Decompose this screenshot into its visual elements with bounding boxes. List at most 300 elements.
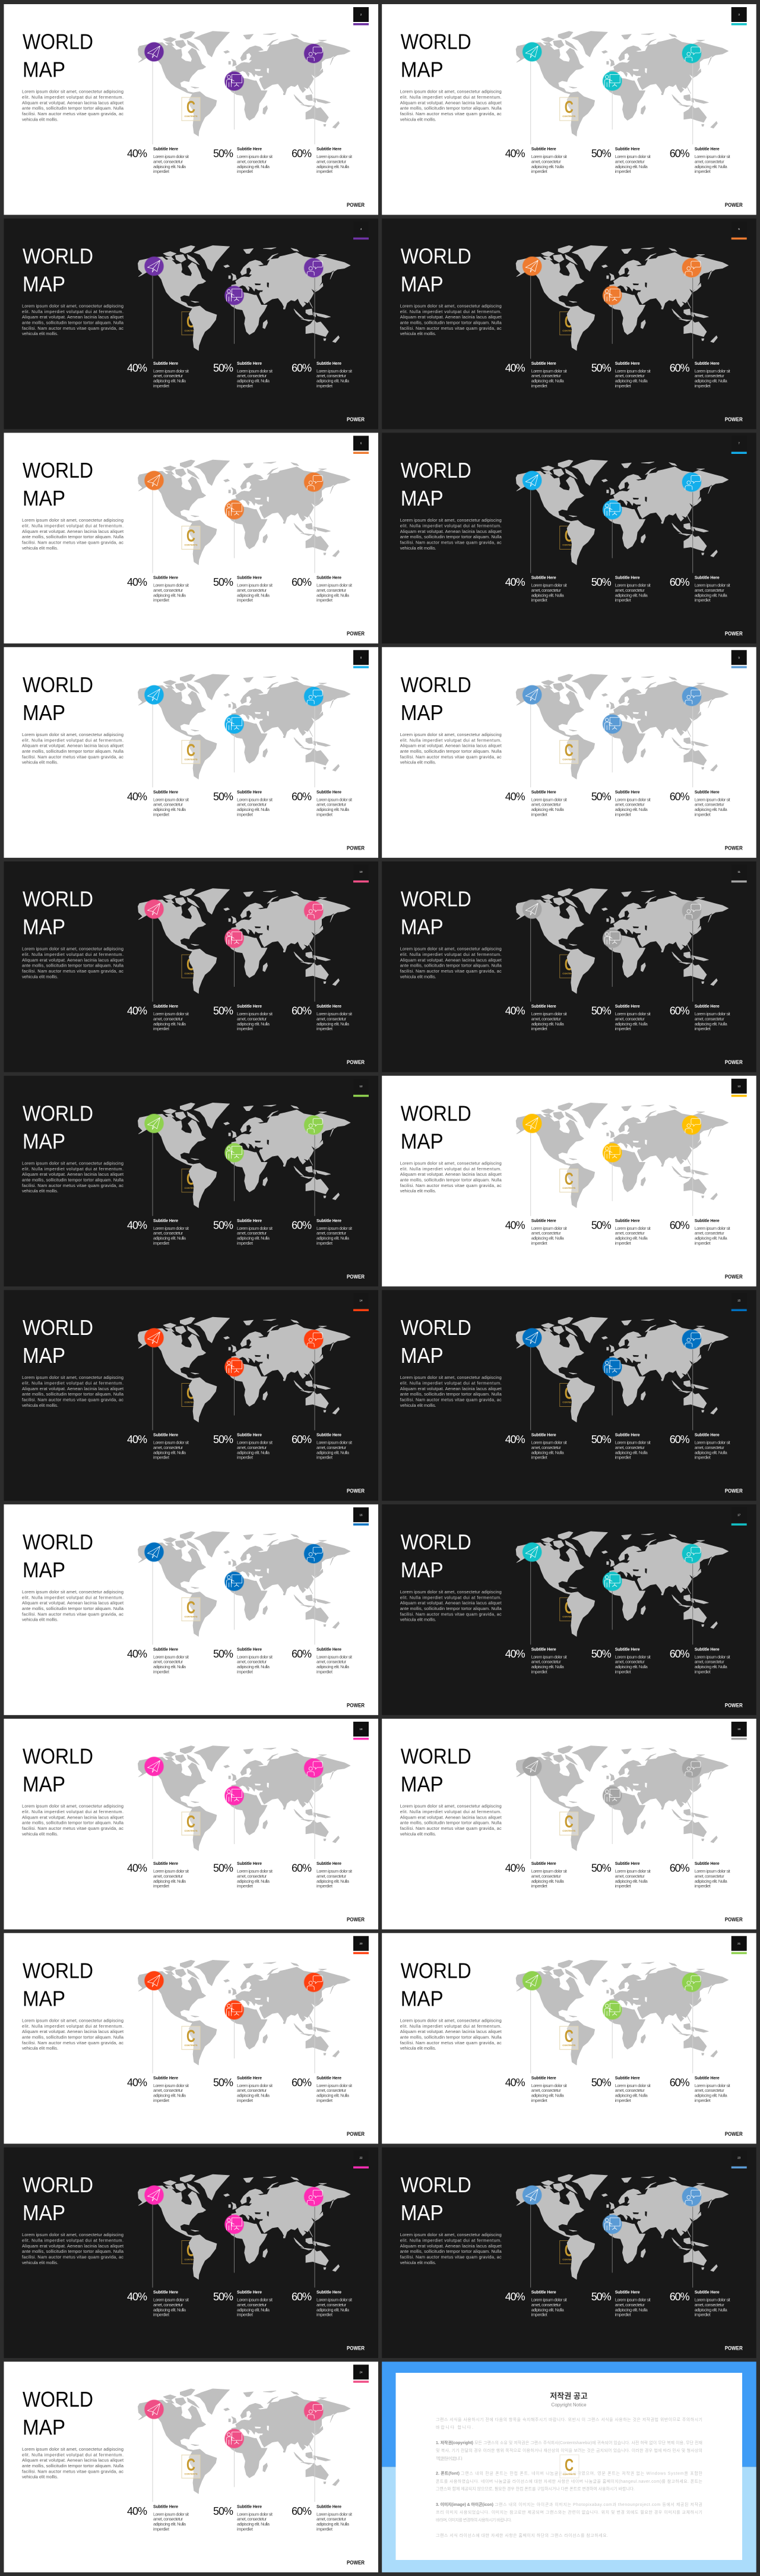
icon: presenter pin	[603, 286, 622, 305]
watermark logo	[560, 2241, 578, 2264]
stat 50%: amet, consectetur	[615, 159, 645, 164]
watermark logo: C	[565, 1813, 574, 1832]
body text: facilisi. Nam auctor metus vitae quam gravida, ac	[22, 539, 124, 545]
stat 40%: adipiscing elit. Nulla	[153, 378, 186, 384]
stat 60%	[670, 362, 730, 389]
body text: ante mollis, sollicitudin tempor tortor aliquam. Nulla	[22, 2249, 124, 2254]
body text	[22, 2232, 124, 2265]
stat 60%: 60%	[670, 147, 690, 159]
stat 40%: imperdiet	[531, 1454, 547, 1460]
stat 60%: amet, consectetur	[316, 2517, 347, 2522]
body text: vehicula elit mollis.	[400, 1403, 436, 1408]
title	[23, 1530, 93, 1582]
stat 50%: Subtitle Here	[615, 1433, 640, 1438]
body text: facilisi. Nam auctor metus vitae quam gravida, ac	[22, 1397, 124, 1402]
stat 40%: adipiscing elit. Nulla	[531, 1236, 565, 1241]
stat 40%: adipiscing elit. Nulla	[153, 1450, 186, 1455]
watermark logo: CONTENTS	[184, 2258, 198, 2261]
world map	[516, 31, 729, 136]
title: MAP	[401, 2201, 444, 2225]
body text: Lorem ipsum dolor sit amet, consectetur adipiscing	[22, 2446, 124, 2452]
stat 50%: imperdiet	[615, 1026, 631, 1031]
body text: vehicula elit mollis.	[400, 1831, 436, 1836]
connector lines	[531, 1347, 693, 1431]
world map	[138, 245, 350, 351]
body text	[400, 1804, 502, 1836]
page number badge: 2	[360, 13, 362, 16]
stat 50%	[591, 790, 651, 817]
title	[23, 673, 93, 725]
body text: elit. Nulla imperdiet volutpat dui at fermentum.	[22, 737, 124, 743]
body text: Lorem ipsum dolor sit amet, consectetur adipiscing	[400, 946, 502, 952]
body text: facilisi. Nam auctor metus vitae quam gravida, ac	[22, 2254, 124, 2260]
brand label: POWER	[347, 2559, 365, 2566]
title: MAP	[23, 1129, 65, 1153]
copyright clause 3: 3. 이미지(image) & 아이콘(icon)	[436, 2502, 493, 2507]
watermark logo: CONTENTS	[184, 757, 198, 760]
icon: paper plane pin	[522, 686, 542, 705]
panel: slide 14 dark red	[4, 1290, 378, 1501]
icon: paper plane pin	[145, 257, 164, 276]
page number badge	[732, 1507, 747, 1526]
brand label: POWER	[347, 1274, 365, 1280]
stat 40%: Subtitle Here	[531, 1862, 556, 1866]
stat 50%: amet, consectetur	[237, 1016, 267, 1021]
stat 60%: Subtitle Here	[316, 790, 341, 794]
title	[401, 1101, 471, 1153]
stat 60%: Subtitle Here	[316, 1005, 341, 1009]
stat 50%: Subtitle Here	[615, 1647, 640, 1652]
body text	[22, 2446, 124, 2480]
stat 40%: amet, consectetur	[531, 802, 561, 807]
stat 40%: amet, consectetur	[531, 1445, 561, 1450]
body text: elit. Nulla imperdiet volutpat dui at fermentum.	[22, 94, 124, 100]
icon: chat person pin	[304, 1544, 323, 1563]
stat 40%: imperdiet	[531, 383, 547, 389]
stat 40%: Lorem ipsum dolor sit	[531, 582, 567, 588]
stat 40%	[505, 1433, 567, 1460]
body text: elit. Nulla imperdiet volutpat dui at fermentum.	[22, 2452, 124, 2457]
watermark logo: C	[186, 2027, 195, 2046]
panel: slide 2 light purple	[4, 4, 378, 215]
title	[401, 673, 471, 725]
stat 50%: adipiscing elit. Nulla	[237, 1879, 270, 1884]
stat 40%	[127, 790, 189, 817]
stat 40%	[505, 1862, 567, 1889]
body text: Lorem ipsum dolor sit amet, consectetur adipiscing	[400, 89, 502, 94]
stat 50%: amet, consectetur	[237, 1445, 267, 1450]
stat 40%: 40%	[127, 147, 147, 159]
stat 50%: Lorem ipsum dolor sit	[237, 368, 273, 374]
page number badge: 21	[737, 1942, 741, 1945]
stat 60%: adipiscing elit. Nulla	[316, 2093, 350, 2098]
stat 50%: imperdiet	[237, 2526, 253, 2531]
stat 50%: Subtitle Here	[237, 1219, 262, 1223]
connector lines	[153, 276, 315, 359]
stat 50%: adipiscing elit. Nulla	[237, 1236, 270, 1241]
body text: facilisi. Nam auctor metus vitae quam gravida, ac	[400, 111, 502, 116]
title: MAP	[401, 1343, 444, 1368]
icon: paper plane pin	[522, 1543, 542, 1562]
stat 40%: adipiscing elit. Nulla	[531, 164, 565, 169]
title: WORLD	[401, 1101, 471, 1125]
stat 40%: adipiscing elit. Nulla	[531, 2093, 565, 2098]
copyright clause 1: 모든 그랜스의 소유 및 저작권은 그랜스 주식회사(Contentsharebiz)에 귀속되어 있습니다. 사전 허락 없이 무단 복제 이용, 무단 전재	[474, 2440, 702, 2445]
stat 50%: Lorem ipsum dolor sit	[615, 1226, 651, 1231]
stat 60%: amet, consectetur	[695, 159, 724, 164]
copyright heading: Copyright Notice	[551, 2403, 587, 2407]
stat 60%: adipiscing elit. Nulla	[695, 807, 728, 812]
page number badge: 8	[360, 656, 362, 659]
stat 50%: Subtitle Here	[615, 2076, 640, 2081]
stat 40%: amet, consectetur	[153, 1873, 183, 1879]
stat 50%: Lorem ipsum dolor sit	[615, 368, 651, 374]
stat 60%: imperdiet	[695, 1240, 711, 1246]
stat 40%: 40%	[127, 2076, 147, 2088]
body text: elit. Nulla imperdiet volutpat dui at fermentum.	[22, 523, 124, 529]
body text: Lorem ipsum dolor sit amet, consectetur adipiscing	[22, 89, 124, 94]
stat 60%: imperdiet	[316, 1026, 332, 1031]
stat 50%: Lorem ipsum dolor sit	[237, 1011, 273, 1016]
stat 50%: Subtitle Here	[615, 790, 640, 794]
stat 40%: amet, consectetur	[153, 2088, 183, 2093]
body text: elit. Nulla imperdiet volutpat dui at fermentum.	[400, 737, 502, 743]
stat 50%: amet, consectetur	[237, 802, 267, 807]
stat 60%: Subtitle Here	[316, 1219, 341, 1223]
title: WORLD	[401, 458, 471, 482]
title: MAP	[23, 1558, 65, 1582]
icon: presenter pin	[224, 715, 243, 734]
watermark logo: CONTENTS	[184, 1615, 198, 1618]
body text: elit. Nulla imperdiet volutpat dui at fermentum.	[22, 2023, 124, 2029]
stat 40%: Subtitle Here	[153, 1433, 178, 1438]
body text: facilisi. Nam auctor metus vitae quam gravida, ac	[22, 2040, 124, 2045]
stat 40%: adipiscing elit. Nulla	[153, 2521, 186, 2527]
stat 40%: adipiscing elit. Nulla	[531, 378, 565, 384]
stat 60%: adipiscing elit. Nulla	[316, 164, 350, 169]
stat 50%: Subtitle Here	[237, 1647, 262, 1652]
stat 50%: imperdiet	[237, 1669, 253, 1674]
brand label: POWER	[725, 2131, 743, 2138]
stat 50%: imperdiet	[237, 1026, 253, 1031]
watermark logo	[560, 740, 578, 763]
stat 60%: 60%	[670, 2076, 690, 2088]
stat 60%: imperdiet	[316, 1669, 332, 1674]
panel: slide 8 light sky blue	[4, 647, 378, 858]
stat 40%: imperdiet	[531, 1240, 547, 1246]
watermark logo: CONTENTS	[562, 115, 576, 118]
body text: Lorem ipsum dolor sit amet, consectetur adipiscing	[400, 1804, 502, 1808]
body text	[400, 303, 502, 336]
stat 60%: imperdiet	[316, 598, 332, 602]
body text: elit. Nulla imperdiet volutpat dui at fermentum.	[400, 1809, 502, 1814]
stat 40%: 40%	[505, 1648, 525, 1660]
title	[23, 1101, 93, 1153]
stat 60%: Lorem ipsum dolor sit	[316, 1868, 352, 1874]
page number badge: 6	[360, 442, 362, 444]
stat 60%: adipiscing elit. Nulla	[695, 1450, 728, 1455]
stat 60%: amet, consectetur	[695, 1230, 724, 1236]
stat 60%: Lorem ipsum dolor sit	[316, 2511, 352, 2517]
brand label: POWER	[347, 2345, 365, 2351]
stat 60%: Subtitle Here	[316, 362, 341, 366]
watermark logo	[182, 740, 200, 763]
body text	[22, 1589, 124, 1622]
stat 60%: amet, consectetur	[695, 1445, 724, 1450]
body text: facilisi. Nam auctor metus vitae quam gravida, ac	[400, 1611, 502, 1617]
body text: Aliquam erat volutpat. Aenean lacinia lacus aliquet	[400, 100, 502, 105]
stat 40%: 40%	[505, 576, 525, 588]
stat 50%: Lorem ipsum dolor sit	[237, 1654, 273, 1659]
stat 40%	[127, 1219, 189, 1246]
body text: Aliquam erat volutpat. Aenean lacinia lacus aliquet	[400, 529, 502, 534]
stat 50%: amet, consectetur	[237, 1873, 267, 1879]
stat 50%: adipiscing elit. Nulla	[615, 807, 648, 812]
world map	[138, 1317, 350, 1422]
stat 50%	[213, 576, 273, 602]
copyright heading: 저작권 공고	[550, 2392, 588, 2400]
stat 40%: 40%	[505, 1219, 525, 1231]
title	[401, 30, 471, 82]
body text	[400, 946, 502, 979]
stat 50%: amet, consectetur	[615, 1445, 645, 1450]
stat 40%: 40%	[127, 791, 147, 803]
brand label: POWER	[347, 1917, 365, 1923]
stat 60%: adipiscing elit. Nulla	[695, 2093, 728, 2098]
stat 60%: Lorem ipsum dolor sit	[316, 154, 352, 159]
body text	[400, 1160, 502, 1194]
stat 60%: Subtitle Here	[695, 1862, 720, 1866]
body text: elit. Nulla imperdiet volutpat dui at fermentum.	[400, 1595, 502, 1600]
stat 60%: Subtitle Here	[316, 1433, 341, 1438]
icon: chat person pin	[304, 258, 323, 277]
connector lines	[153, 1561, 315, 1644]
stat 50%: adipiscing elit. Nulla	[615, 1879, 648, 1884]
stat 60%	[670, 1219, 730, 1246]
stat 50%: adipiscing elit. Nulla	[615, 1236, 648, 1241]
stat 40%: imperdiet	[153, 598, 169, 602]
panel: slide 22 dark magenta	[4, 2147, 378, 2358]
copyright intro	[436, 2417, 702, 2430]
stat 60%: imperdiet	[695, 2312, 711, 2317]
stat 50%: Subtitle Here	[237, 2505, 262, 2509]
watermark logo	[182, 2455, 200, 2478]
title: WORLD	[401, 2173, 471, 2197]
stat 50%: imperdiet	[237, 1454, 253, 1460]
brand label: POWER	[347, 2131, 365, 2138]
page number badge	[732, 2151, 747, 2168]
stat 40%: adipiscing elit. Nulla	[153, 1236, 186, 1241]
stat 60%: Lorem ipsum dolor sit	[695, 154, 730, 159]
body text: ante mollis, sollicitudin tempor tortor aliquam. Nulla	[22, 1820, 124, 1826]
body text: Aliquam erat volutpat. Aenean lacinia lacus aliquet	[400, 1600, 502, 1606]
stat 60%: imperdiet	[695, 169, 711, 174]
icon: chat person pin	[682, 1759, 701, 1778]
title: WORLD	[401, 673, 471, 697]
stat 60%: 60%	[670, 2291, 690, 2303]
body text: Aliquam erat volutpat. Aenean lacinia lacus aliquet	[22, 314, 124, 320]
stat 60%: Lorem ipsum dolor sit	[695, 1226, 730, 1231]
stat 60%: imperdiet	[316, 812, 332, 817]
icon: presenter pin	[603, 1143, 622, 1162]
stat 50%: Lorem ipsum dolor sit	[615, 1654, 651, 1659]
stat 60%: Lorem ipsum dolor sit	[316, 2297, 352, 2303]
stat 60%	[292, 1005, 352, 1031]
body text: ante mollis, sollicitudin tempor tortor aliquam. Nulla	[22, 320, 124, 325]
stat 60%: adipiscing elit. Nulla	[316, 592, 350, 598]
stat 60%: Lorem ipsum dolor sit	[316, 1011, 352, 1016]
copyright intro: 그랜스 서식을 사용하시기 전에 다음의 항목을 숙지해주시기 바랍니다. 위반시 이 그랜스 서식을 사용하는 것은 저작권법 위반이므로 주의하시기	[436, 2417, 702, 2422]
title: MAP	[401, 57, 444, 82]
watermark logo	[182, 1169, 200, 1192]
stat 60%: Lorem ipsum dolor sit	[695, 797, 730, 802]
stat 40%: Lorem ipsum dolor sit	[153, 2083, 189, 2088]
copyright heading	[550, 2392, 588, 2407]
body text: Aliquam erat volutpat. Aenean lacinia lacus aliquet	[400, 1814, 502, 1820]
stat 60%	[292, 1647, 352, 1674]
stat 60%: Lorem ipsum dolor sit	[695, 1868, 730, 1874]
copyright clause 2: 그랜스 내의 한글 폰트는 한컴 폰트, 네이버 나눔글꼴을 사용하였으며, 영문 폰트는 저작권 없는 Windows System을 포함한	[461, 2470, 703, 2476]
body text: facilisi. Nam auctor metus vitae quam gravida, ac	[400, 539, 502, 545]
stat 40%: amet, consectetur	[153, 1230, 183, 1236]
stat 60%: amet, consectetur	[316, 2088, 347, 2093]
stat 40%: amet, consectetur	[531, 1659, 561, 1665]
panel: slide 24 light pink	[4, 2362, 378, 2572]
icon: presenter pin	[224, 500, 243, 519]
page number badge: 9	[738, 656, 740, 659]
stat 50%: adipiscing elit. Nulla	[237, 1664, 270, 1669]
body text: elit. Nulla imperdiet volutpat dui at fermentum.	[22, 1595, 124, 1600]
stat 60%: 60%	[292, 791, 312, 803]
stat 50%: Lorem ipsum dolor sit	[237, 797, 273, 802]
body text: vehicula elit mollis.	[22, 1617, 58, 1622]
stat 40%: amet, consectetur	[153, 1016, 183, 1021]
world map	[516, 245, 729, 351]
body text	[22, 89, 124, 122]
stat 50%: imperdiet	[237, 2312, 253, 2317]
stat 60%: imperdiet	[695, 1883, 711, 1889]
page number badge	[353, 436, 369, 454]
body text: ante mollis, sollicitudin tempor tortor aliquam. Nulla	[22, 963, 124, 968]
watermark logo	[182, 955, 200, 978]
page number badge	[732, 1293, 747, 1311]
stat 60%: 60%	[292, 1434, 312, 1445]
brand label: POWER	[725, 416, 743, 423]
body text: ante mollis, sollicitudin tempor tortor aliquam. Nulla	[400, 2249, 502, 2254]
stat 50%: imperdiet	[615, 1669, 631, 1674]
stat 40%	[505, 2076, 567, 2103]
body text: ante mollis, sollicitudin tempor tortor aliquam. Nulla	[22, 2034, 124, 2040]
world map	[516, 674, 729, 779]
stat 60%: Subtitle Here	[695, 1647, 720, 1652]
stat 50%: Subtitle Here	[615, 2291, 640, 2294]
title: WORLD	[401, 1530, 471, 1554]
body text: ante mollis, sollicitudin tempor tortor aliquam. Nulla	[22, 749, 124, 754]
stat 50%: adipiscing elit. Nulla	[237, 807, 270, 812]
stat 40%	[505, 2291, 567, 2317]
title	[23, 2173, 93, 2225]
title: MAP	[401, 272, 444, 296]
watermark logo	[182, 2241, 200, 2264]
icon: chat person pin	[304, 473, 323, 492]
stat 60%	[670, 1005, 730, 1031]
watermark logo: CONTENTS	[184, 115, 198, 118]
stat 40%: 40%	[505, 147, 525, 159]
page number badge	[353, 2151, 369, 2168]
connector lines	[153, 1990, 315, 2073]
stat 40%: imperdiet	[153, 1669, 169, 1674]
body text: Aliquam erat volutpat. Aenean lacinia lacus aliquet	[400, 2029, 502, 2034]
icon: presenter pin	[603, 500, 622, 519]
body text: facilisi. Nam auctor metus vitae quam gravida, ac	[400, 1397, 502, 1402]
stat 40%: 40%	[127, 2291, 147, 2303]
panel: slide 20 light red	[4, 1933, 378, 2143]
stat 50%: Subtitle Here	[237, 362, 262, 366]
stat 40%: Subtitle Here	[531, 576, 556, 580]
stat 40%: adipiscing elit. Nulla	[531, 1664, 565, 1669]
body text	[22, 303, 124, 336]
body text: ante mollis, sollicitudin tempor tortor aliquam. Nulla	[400, 534, 502, 539]
stat 60%: 60%	[670, 791, 690, 803]
copyright clause 1: 책임을 질 수 있습니다.	[436, 2456, 463, 2461]
copyright clause 1: 1. 저작권(copyright)	[436, 2440, 473, 2445]
stat 40%: amet, consectetur	[531, 2088, 561, 2093]
world map	[516, 889, 729, 993]
page number badge: 17	[737, 1513, 741, 1516]
panel: slide 21 light lime	[382, 1933, 756, 2143]
stat 60%	[670, 576, 730, 602]
watermark logo: C	[186, 955, 195, 974]
copyright clause 3: 그랜스 내의 이미지는 아이콘과 이미지는 Photopixabay.com과 thenounproject.com 등에서 제공된 저작권	[495, 2502, 702, 2507]
stat 50%: 50%	[591, 362, 612, 374]
stat 40%: 40%	[505, 2076, 525, 2088]
stat 60%: Lorem ipsum dolor sit	[695, 368, 730, 374]
watermark logo: CONTENTS	[562, 1186, 576, 1189]
icon: presenter pin	[224, 2429, 243, 2448]
stat 60%: Subtitle Here	[316, 1862, 341, 1866]
watermark logo	[182, 1598, 200, 1621]
body text: facilisi. Nam auctor metus vitae quam gravida, ac	[22, 1183, 124, 1188]
watermark logo: C	[186, 741, 195, 760]
body text: Lorem ipsum dolor sit amet, consectetur adipiscing	[400, 2018, 502, 2023]
stat 40%: Lorem ipsum dolor sit	[531, 154, 567, 159]
stat 40%: Subtitle Here	[531, 2291, 556, 2294]
stat 50%: 50%	[591, 2291, 612, 2303]
body text: vehicula elit mollis.	[400, 2260, 436, 2265]
stat 40%: adipiscing elit. Nulla	[153, 1664, 186, 1669]
watermark logo: CONTENTS	[562, 2044, 576, 2047]
body text: vehicula elit mollis.	[22, 2045, 58, 2051]
brand label: POWER	[347, 1059, 365, 1066]
page number badge: 18	[359, 1728, 363, 1731]
stat 60%: amet, consectetur	[695, 2302, 724, 2307]
stat 60%: Subtitle Here	[695, 2076, 720, 2081]
stat 40%: Lorem ipsum dolor sit	[531, 368, 567, 374]
icon: presenter pin	[603, 929, 622, 948]
stat 60%: adipiscing elit. Nulla	[695, 378, 728, 384]
page number badge: 20	[359, 1942, 363, 1945]
title: MAP	[23, 2415, 65, 2439]
title: WORLD	[23, 1958, 93, 1982]
watermark logo: CONTENTS	[184, 972, 198, 975]
stat 40%: Subtitle Here	[531, 1005, 556, 1009]
icon: chat person pin	[682, 1973, 701, 1992]
title	[23, 886, 93, 939]
stat 50%: 50%	[213, 147, 233, 159]
body text	[400, 1589, 502, 1622]
icon: presenter pin	[224, 929, 243, 948]
body text: Lorem ipsum dolor sit amet, consectetur adipiscing	[400, 1375, 502, 1380]
